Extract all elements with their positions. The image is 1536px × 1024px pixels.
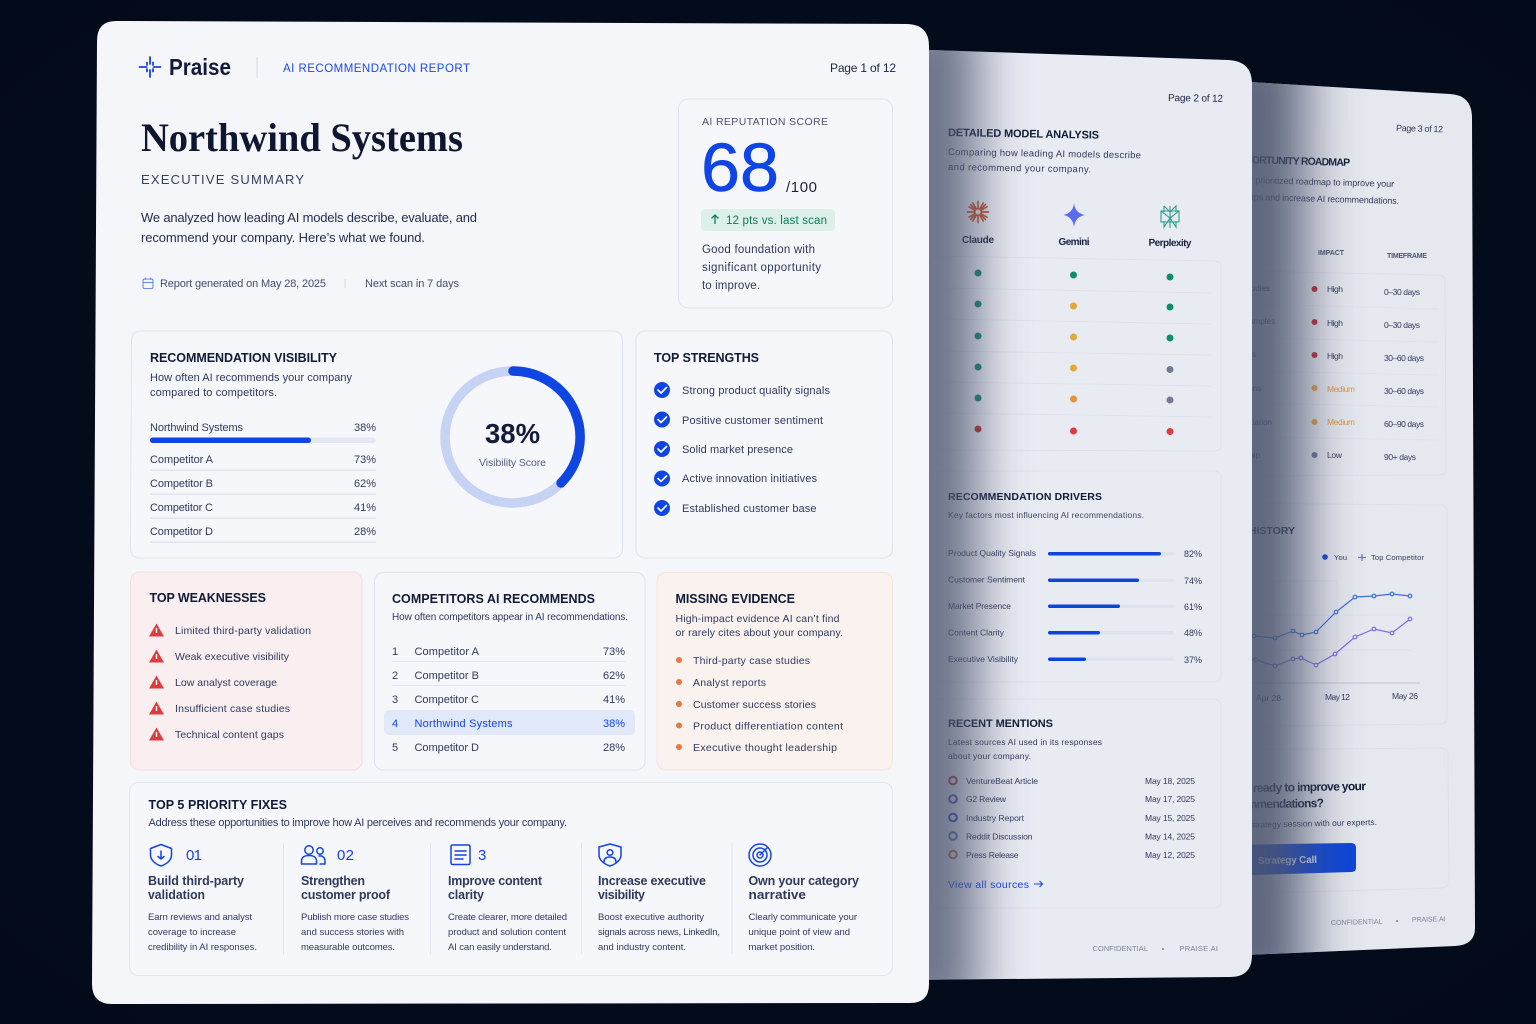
report date meta: Report generated on May 28, 2025 bbox=[160, 278, 326, 290]
label: Perplexity: Perplexity bbox=[1148, 238, 1192, 249]
missing evidence description: or rarely cites about your company. bbox=[676, 627, 843, 639]
source names: Press Release bbox=[966, 850, 1019, 860]
icon: target bbox=[749, 844, 771, 866]
page 3 footer: CONFIDENTIAL bbox=[1331, 919, 1383, 927]
visibility description: How often AI recommends your company bbox=[150, 372, 352, 384]
ranking rows: 38% bbox=[603, 718, 625, 730]
fix title: Increase executive bbox=[598, 874, 706, 888]
fix 2 bbox=[301, 846, 409, 953]
panel: recent mentions bbox=[931, 699, 1221, 908]
competitor rows: 41% bbox=[354, 502, 376, 514]
timeframe labels bbox=[1384, 287, 1424, 462]
fix 1 bbox=[148, 844, 257, 953]
table headers: TIMEFRAME bbox=[1387, 253, 1427, 260]
fix body: Boost executive authority bbox=[598, 912, 704, 923]
number: 01 bbox=[186, 847, 202, 864]
source dates: May 12, 2025 bbox=[1145, 850, 1195, 860]
trend pill: 12 pts vs. last scan bbox=[726, 215, 827, 227]
strengths list: Strong product quality signals bbox=[682, 385, 830, 397]
highlighted row: Northwind Systems: 38% bbox=[354, 422, 376, 434]
date axis labels: May 26 bbox=[1392, 691, 1418, 701]
fix body: measurable outcomes. bbox=[301, 942, 395, 953]
subtitle: EXECUTIVE SUMMARY bbox=[141, 172, 304, 187]
icon: user shield bbox=[599, 844, 621, 866]
panel: visibility history bbox=[1193, 503, 1447, 727]
source dates: May 17, 2025 bbox=[1145, 794, 1195, 804]
impact labels: High bbox=[1327, 318, 1343, 328]
row dividers bbox=[392, 662, 625, 686]
ranking rows bbox=[392, 646, 625, 754]
page 2 number: Page 2 of 12 bbox=[1168, 93, 1224, 105]
page 3 sheet bbox=[1200, 79, 1475, 957]
fix title: Own your category bbox=[748, 874, 859, 888]
fix body: credibility in AI responses. bbox=[148, 942, 257, 953]
fix body: Clearly communicate your bbox=[748, 912, 857, 923]
priority heading: TOP 5 PRIORITY FIXES bbox=[148, 798, 287, 812]
weaknesses list bbox=[175, 625, 311, 741]
missing evidence list: Third-party case studies bbox=[693, 655, 810, 667]
header bbox=[140, 54, 896, 80]
score summary: significant opportunity bbox=[702, 262, 821, 274]
weaknesses list: Insufficient case studies bbox=[175, 703, 290, 715]
highlighted row background bbox=[384, 710, 635, 735]
page 2 description: and recommend your company. bbox=[948, 162, 1091, 175]
fix body: signals across news, LinkedIn, bbox=[598, 927, 720, 938]
page 3 footer bbox=[1331, 916, 1446, 927]
fix body bbox=[148, 912, 257, 953]
page 2 footer: CONFIDENTIAL bbox=[1092, 944, 1148, 953]
visibility description bbox=[150, 372, 352, 399]
panel: missing evidence bbox=[657, 572, 892, 770]
roadmap table bbox=[1200, 250, 1446, 476]
missing evidence list: Product differentiation content bbox=[693, 720, 843, 732]
weaknesses heading: TOP WEAKNESSES bbox=[150, 591, 266, 605]
Claude column dots bbox=[974, 270, 982, 432]
ranking rows: 1 bbox=[392, 646, 398, 658]
source icons bbox=[949, 777, 957, 858]
source names: Reddit Discussion bbox=[966, 832, 1033, 842]
competitor rows: 62% bbox=[354, 478, 376, 490]
fix body bbox=[598, 912, 720, 953]
bullets bbox=[676, 657, 682, 750]
intro text bbox=[141, 210, 477, 245]
panel: top strengths bbox=[636, 331, 892, 558]
impact labels: Medium bbox=[1327, 384, 1355, 394]
source dates: May 18, 2025 bbox=[1145, 776, 1195, 786]
warning icons bbox=[149, 624, 164, 740]
panel: recommendation drivers bbox=[931, 471, 1221, 682]
highlighted row: Northwind Systems: Northwind Systems bbox=[150, 422, 244, 434]
missing evidence list: Customer success stories bbox=[693, 699, 816, 711]
page 3 shadow from page 2 bbox=[1252, 82, 1347, 954]
ranking rows: Competitor B bbox=[414, 670, 479, 682]
visibility heading: RECOMMENDATION VISIBILITY bbox=[150, 351, 338, 365]
row initiative fragments: Briefings bbox=[1225, 350, 1256, 359]
fix body: unique point of view and bbox=[748, 927, 850, 938]
source names: VentureBeat Article bbox=[966, 776, 1038, 786]
drivers outline bbox=[931, 471, 1221, 682]
fix body: AI can easily understand. bbox=[448, 942, 552, 953]
competitor rows: Competitor A bbox=[150, 454, 214, 466]
weaknesses list: Weak executive visibility bbox=[175, 651, 290, 663]
panel: AI reputation score bbox=[678, 99, 892, 308]
chart legend bbox=[1322, 553, 1424, 562]
fix title bbox=[301, 874, 391, 902]
Gemini column dots bbox=[1070, 272, 1077, 434]
page 3: opportunity roadmap bbox=[1252, 82, 1475, 955]
source dates: May 15, 2025 bbox=[1145, 813, 1195, 823]
ranking rows: Northwind Systems bbox=[414, 718, 513, 730]
page 3 content bbox=[1193, 123, 1449, 927]
page 3 description bbox=[1238, 175, 1399, 206]
competitor rows: Competitor C bbox=[150, 502, 213, 514]
trend pill bbox=[701, 209, 835, 231]
weaknesses panel box bbox=[130, 572, 362, 770]
mentions description bbox=[948, 737, 1102, 761]
fix 5 bbox=[748, 844, 859, 953]
page 2 footer: PRAISE.AI bbox=[1180, 944, 1218, 953]
page 2 shadow from page 1 bbox=[929, 50, 1016, 980]
timeframe labels: 60–90 days bbox=[1384, 419, 1424, 429]
source names bbox=[966, 776, 1038, 860]
report label: AI RECOMMENDATION REPORT bbox=[283, 63, 470, 75]
page 2 description: Comparing how leading AI models describe bbox=[948, 147, 1141, 161]
driver labels bbox=[948, 548, 1036, 664]
weaknesses list: Low analyst coverage bbox=[175, 677, 277, 689]
drivers heading: RECOMMENDATION DRIVERS bbox=[948, 491, 1102, 503]
donut chart: Visibility Score bbox=[479, 457, 546, 469]
fix title: customer proof bbox=[301, 888, 391, 902]
missing evidence description bbox=[676, 613, 843, 639]
date axis labels bbox=[1256, 691, 1418, 703]
strengths list: Solid market presence bbox=[682, 444, 793, 456]
page 3 number: Page 3 of 12 bbox=[1396, 123, 1443, 134]
driver bar fills bbox=[1048, 552, 1161, 661]
row initiative fragments: Differentiation bbox=[1223, 418, 1272, 427]
fix title: narrative bbox=[748, 888, 806, 902]
driver labels: Market Presence bbox=[948, 601, 1011, 611]
fix body bbox=[748, 912, 857, 953]
impact dots bbox=[1312, 286, 1318, 458]
timeframe labels: 0–30 days bbox=[1384, 287, 1420, 297]
score value: 68 bbox=[701, 129, 779, 206]
donut chart bbox=[445, 371, 580, 503]
ranking rows: Competitor D bbox=[414, 742, 479, 754]
page 3 heading: OPPORTUNITY ROADMAP bbox=[1232, 154, 1350, 169]
driver labels: Customer Sentiment bbox=[948, 574, 1026, 584]
score panel box bbox=[678, 99, 892, 308]
source dates bbox=[1145, 776, 1195, 860]
timeframe labels: 30–60 days bbox=[1384, 386, 1424, 396]
fix 3 bbox=[448, 845, 567, 953]
fix body bbox=[448, 912, 567, 953]
chart legend: Top Competitor bbox=[1371, 553, 1424, 562]
panel: competitors AI recommends bbox=[374, 572, 645, 770]
ranking rows: Competitor A bbox=[414, 646, 480, 658]
fix title: validation bbox=[148, 888, 205, 902]
driver percentages bbox=[1184, 549, 1202, 665]
CTA heading: Are you ready to improve your bbox=[1210, 779, 1366, 796]
page 2: detailed model analysis bbox=[929, 50, 1252, 980]
page 2 sheet bbox=[900, 49, 1252, 980]
mentions heading: RECENT MENTIONS bbox=[948, 718, 1053, 730]
competitors description: How often competitors appear in AI recommendations. bbox=[392, 612, 628, 623]
ranking rows: 28% bbox=[603, 742, 625, 754]
competitors heading: COMPETITORS AI RECOMMENDS bbox=[392, 592, 595, 606]
fix title bbox=[748, 874, 859, 902]
intro text: We analyzed how leading AI models describe, evaluate, and bbox=[141, 210, 477, 225]
panel: top 5 priority fixes bbox=[130, 782, 892, 976]
competitor rows: 73% bbox=[354, 454, 376, 466]
missing evidence list: Executive thought leadership bbox=[693, 742, 837, 754]
fix title: clarity bbox=[448, 888, 484, 902]
ranking rows: 41% bbox=[603, 694, 625, 706]
number: 02 bbox=[337, 847, 354, 864]
driver percentages: 74% bbox=[1184, 576, 1202, 586]
page 1: executive summary bbox=[92, 21, 929, 1004]
missing evidence panel box bbox=[657, 572, 892, 770]
strengths list: Positive customer sentiment bbox=[682, 415, 823, 427]
icon: Claude bbox=[968, 202, 988, 222]
table panel bbox=[1200, 270, 1446, 476]
missing evidence description: High-impact evidence AI can’t find bbox=[676, 613, 840, 625]
score summary: to improve. bbox=[702, 280, 760, 292]
priority description: Address these opportunities to improve how AI perceives and recommends your company. bbox=[148, 817, 567, 829]
driver percentages: 37% bbox=[1184, 655, 1202, 665]
visibility panel box bbox=[130, 331, 622, 558]
row initiative fragments: Case studies bbox=[1224, 284, 1270, 293]
strengths panel box bbox=[636, 331, 892, 558]
driver labels: Product Quality Signals bbox=[948, 548, 1036, 558]
impact labels: High bbox=[1327, 284, 1343, 294]
ranking rows: 4 bbox=[392, 718, 398, 730]
title: Northwind Systems bbox=[141, 115, 463, 160]
fix body bbox=[301, 912, 409, 953]
page 2 heading: DETAILED MODEL ANALYSIS bbox=[948, 127, 1099, 142]
fix body: market position. bbox=[748, 942, 815, 953]
timeframe labels: 90+ days bbox=[1384, 452, 1416, 462]
page 3 description: gaps and increase AI recommendations. bbox=[1244, 192, 1399, 206]
impact labels: Low bbox=[1327, 450, 1343, 460]
fix body: and industry content. bbox=[598, 942, 686, 953]
strengths heading: TOP STRENGTHS bbox=[654, 351, 759, 365]
row initiative fragments: Leadership bbox=[1220, 451, 1261, 460]
icon: calendar bbox=[143, 278, 153, 288]
row initiative fragments: Customer examples bbox=[1204, 317, 1275, 326]
icon: people bbox=[302, 846, 325, 864]
chart legend: You bbox=[1334, 553, 1347, 562]
score scale: /100 bbox=[786, 179, 817, 196]
fix body: coverage to increase bbox=[148, 927, 236, 938]
mentions description: Latest sources AI used in its responses bbox=[948, 737, 1102, 747]
page 1 sheet bbox=[92, 21, 929, 1004]
panel: top weaknesses bbox=[130, 572, 362, 770]
icon: Praise logo bbox=[140, 57, 160, 77]
driver labels: Executive Visibility bbox=[948, 654, 1019, 664]
fix title bbox=[448, 874, 543, 902]
timeframe labels: 30–60 days bbox=[1384, 353, 1424, 363]
weaknesses list: Limited third-party validation bbox=[175, 625, 311, 637]
donut chart: 38% bbox=[485, 418, 540, 449]
driver labels: Content Clarity bbox=[948, 628, 1005, 638]
label: Gemini: Gemini bbox=[1058, 237, 1090, 248]
page 2 footer bbox=[1092, 944, 1218, 953]
source names: G2 Review bbox=[966, 794, 1007, 804]
CTA heading bbox=[1210, 779, 1366, 812]
fix body: Create clearer, more detailed bbox=[448, 912, 567, 923]
CTA button: Strategy Call bbox=[1258, 855, 1317, 867]
line: you bbox=[1238, 592, 1412, 640]
row initiative fragments bbox=[1204, 284, 1275, 460]
impact labels: High bbox=[1327, 351, 1343, 361]
missing evidence heading: MISSING EVIDENCE bbox=[676, 592, 795, 606]
number: 3 bbox=[478, 847, 486, 864]
row dividers bbox=[1252, 304, 1438, 440]
date axis labels: May 12 bbox=[1325, 692, 1350, 702]
page 3 description: Our prioritized roadmap to improve your bbox=[1238, 175, 1394, 189]
panel: recommendation visibility bbox=[130, 331, 622, 558]
page 2 description bbox=[948, 147, 1141, 175]
CTA button bbox=[1220, 843, 1356, 876]
fix title: Build third-party bbox=[148, 874, 244, 888]
chart axis bbox=[1240, 682, 1420, 684]
page number: Page 1 of 12 bbox=[830, 61, 896, 75]
drivers description: Key factors most influencing AI recommendations. bbox=[948, 510, 1144, 520]
driver percentages: 61% bbox=[1184, 602, 1202, 612]
fix body: product and solution content bbox=[448, 927, 566, 938]
mentions description: about your company. bbox=[948, 751, 1031, 761]
ranking rows: 62% bbox=[603, 670, 625, 682]
icon: document bbox=[451, 845, 470, 864]
history heading: VISIBILITY HISTORY bbox=[1193, 525, 1295, 537]
icon: Perplexity bbox=[1161, 206, 1179, 228]
model score table bbox=[931, 256, 1221, 451]
visibility description: compared to competitors. bbox=[150, 387, 277, 399]
panel: call to action bbox=[1200, 748, 1449, 895]
page 3 footer: PRAISE.AI bbox=[1412, 916, 1446, 924]
source dates: May 14, 2025 bbox=[1145, 832, 1195, 842]
table headers bbox=[1318, 250, 1427, 260]
icon: Gemini bbox=[1064, 204, 1085, 227]
table headers: IMPACT bbox=[1318, 250, 1345, 257]
strengths list: Established customer base bbox=[682, 503, 816, 515]
missing evidence list: Analyst reports bbox=[693, 677, 766, 689]
fix title: visibility bbox=[598, 888, 645, 902]
strengths list: Active innovation initiatives bbox=[682, 473, 818, 485]
next scan meta: Next scan in 7 days bbox=[365, 278, 460, 290]
link: view all sources: View all sources bbox=[948, 879, 1029, 891]
priority panel box bbox=[130, 782, 892, 976]
driver percentages: 48% bbox=[1184, 628, 1202, 638]
competitor rows: Competitor B bbox=[150, 478, 213, 490]
missing evidence list bbox=[693, 655, 843, 754]
line: top competitor bbox=[1238, 617, 1412, 668]
Perplexity column dots bbox=[1166, 274, 1174, 435]
CTA heading: AI recommendations? bbox=[1211, 796, 1324, 812]
score label: AI REPUTATION SCORE bbox=[702, 116, 828, 128]
score summary bbox=[702, 244, 821, 292]
fix title: Strengthen bbox=[301, 874, 365, 888]
fix 4 bbox=[598, 844, 720, 953]
logo wordmark: Praise bbox=[169, 54, 231, 80]
source names: Industry Report bbox=[966, 813, 1025, 823]
highlighted row: Northwind Systems bbox=[150, 422, 376, 443]
mentions outline bbox=[931, 699, 1221, 908]
history panel outline bbox=[1200, 503, 1447, 727]
check icons bbox=[654, 382, 670, 516]
driver bar tracks bbox=[1048, 552, 1174, 661]
competitor rows bbox=[150, 454, 376, 543]
icon: shield bbox=[150, 844, 172, 866]
competitor rows: 28% bbox=[354, 526, 376, 538]
intro text: recommend your company. Here’s what we found. bbox=[141, 230, 425, 245]
ranking rows: 2 bbox=[392, 670, 398, 682]
row initiative fragments: Mentions bbox=[1229, 384, 1261, 393]
strengths list bbox=[682, 385, 830, 515]
impact labels bbox=[1327, 284, 1355, 460]
ranking rows: 5 bbox=[392, 742, 398, 754]
fix body: Earn reviews and analyst bbox=[148, 912, 252, 923]
CTA description: Book a strategy session with our experts. bbox=[1222, 817, 1377, 830]
ranking rows: 73% bbox=[603, 646, 625, 658]
competitor rows: Competitor D bbox=[150, 526, 213, 538]
score table dividers bbox=[944, 288, 1211, 417]
competitors panel box bbox=[374, 572, 645, 770]
fix title bbox=[148, 874, 244, 902]
ranking rows: 3 bbox=[392, 694, 398, 706]
timeframe labels: 0–30 days bbox=[1384, 320, 1420, 330]
fix body: and success stories with bbox=[301, 927, 404, 938]
fix title: Improve content bbox=[448, 874, 543, 888]
score summary: Good foundation with bbox=[702, 244, 815, 256]
ranking rows: Competitor C bbox=[414, 694, 479, 706]
CTA outline bbox=[1200, 748, 1449, 895]
weaknesses list: Technical content gaps bbox=[175, 729, 284, 741]
fix title bbox=[598, 874, 706, 902]
driver percentages: 82% bbox=[1184, 549, 1202, 559]
impact labels: Medium bbox=[1327, 417, 1355, 427]
date axis labels: Apr 28 bbox=[1256, 693, 1281, 703]
score table outline bbox=[931, 256, 1221, 451]
fix body: Publish more case studies bbox=[301, 912, 409, 923]
page 2 content bbox=[931, 93, 1224, 953]
grid lines bbox=[1240, 581, 1412, 683]
label: Claude: Claude bbox=[962, 235, 994, 246]
